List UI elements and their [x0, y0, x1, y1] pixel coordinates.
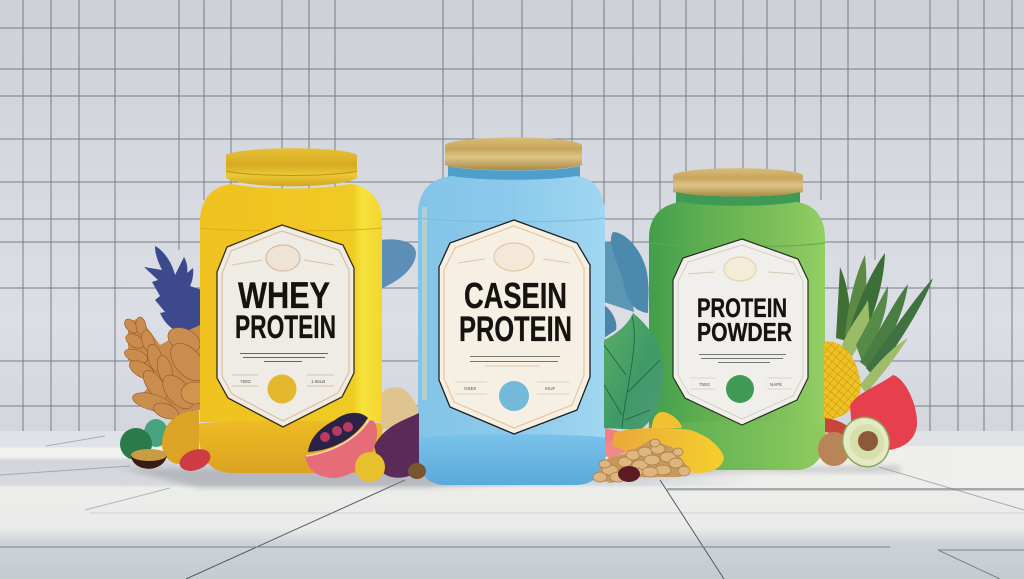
product label: 750G: [240, 379, 252, 384]
fruit group: banana, strawberries and walnuts: [593, 313, 724, 483]
icon: red apple: [850, 375, 917, 450]
icon: walnut pile: [593, 439, 690, 483]
jar body: [649, 202, 825, 425]
icon: green veined leaf: [604, 313, 663, 430]
icon: blue leaf behind whey jar: [380, 239, 416, 289]
icon: brown nut: [818, 432, 850, 466]
icon: pineapple: [824, 253, 933, 420]
product label: CASEIN: [464, 275, 567, 316]
tiled floor: [0, 431, 1024, 579]
product label: [217, 225, 354, 427]
product label: PROTEIN: [235, 309, 336, 345]
jar: protein powder: [648, 168, 826, 470]
icon: teal plum: [144, 419, 168, 447]
wall background with grid: [0, 0, 1024, 432]
background foliage: [122, 232, 649, 430]
icon: teal-blue leaves between jars: [604, 232, 648, 338]
icon: dark dried fruit: [618, 466, 640, 482]
icon: navy feather leaf: [144, 246, 202, 340]
icon: halved fig: [131, 449, 167, 469]
icon: halved avocado: [835, 410, 897, 474]
product label: POWDER: [697, 317, 792, 347]
jar body: [200, 184, 382, 422]
fruit group: left of whey jar: [120, 411, 213, 475]
product label: PROTEIN: [697, 293, 787, 323]
jar cap: brushed gold: [445, 138, 582, 170]
product label: WHEY: [238, 275, 330, 316]
icon: yellow plum: [355, 452, 385, 482]
icon: green plum: [120, 428, 152, 460]
icon: yellow fruit wedge: [652, 412, 682, 428]
product label: [439, 220, 590, 434]
fruit group: pineapple, apple and avocado: [818, 253, 933, 474]
fruit group: bowl and plums: [305, 413, 426, 482]
icon: red fruit slice: [177, 445, 213, 475]
icon: yellow mango: [162, 411, 199, 464]
jar cap: gold: [226, 148, 357, 186]
icon: small nut: [408, 463, 426, 479]
jar body: [418, 176, 605, 438]
product label: OSEK: [464, 386, 477, 391]
icon: beige root behind bowl: [380, 387, 420, 430]
jar: whey protein: [199, 148, 382, 473]
icon: golden wheat and petals: [122, 316, 212, 422]
product label: PROTEIN: [459, 310, 572, 349]
jar: casein protein: [416, 138, 606, 485]
jar cap: brushed gold: [673, 168, 803, 196]
product label: 1.65LB: [311, 379, 325, 384]
product label: [673, 239, 808, 425]
product label: KIUF: [545, 386, 556, 391]
icon: purple plum: [374, 413, 419, 478]
icon: pink berry bowl: [305, 413, 377, 478]
product label: NAPE: [770, 382, 782, 387]
icon: strawberry pieces: [605, 428, 627, 458]
product label: 750G: [699, 382, 711, 387]
icon: banana: [612, 428, 724, 473]
